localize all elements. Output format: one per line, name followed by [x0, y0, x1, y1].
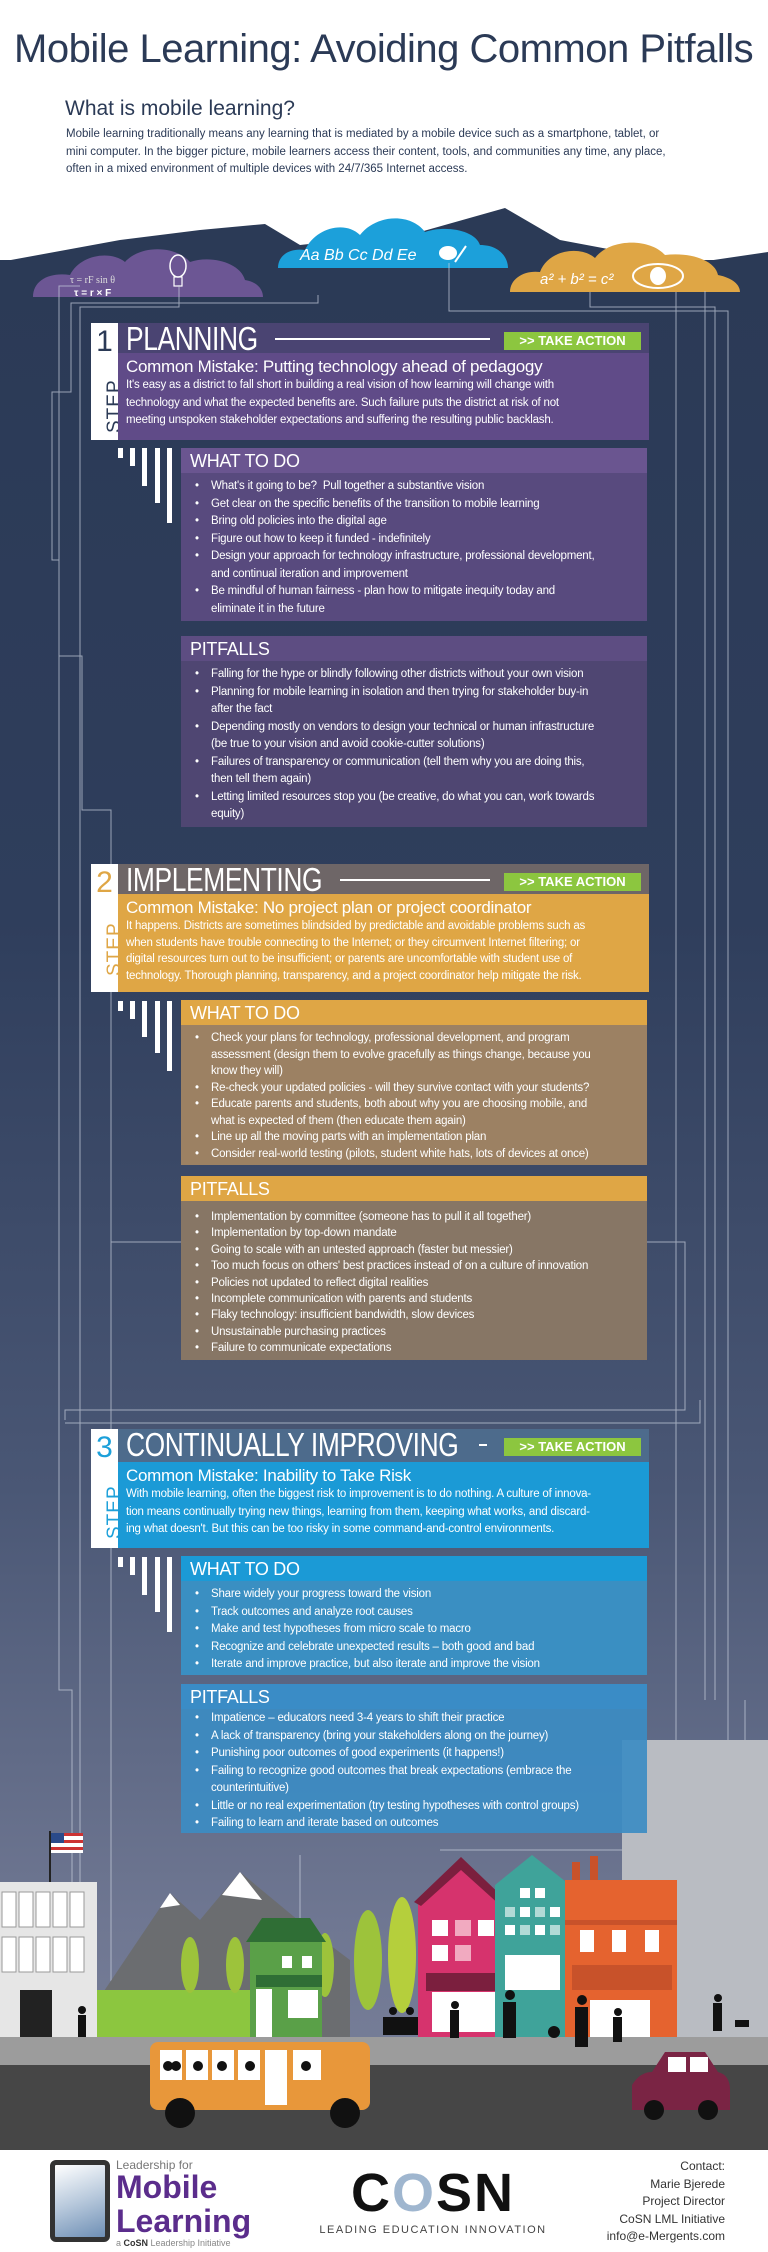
- common mistake text: ing what doesn't. But this can be too risky in some command-and-control environments.: [126, 1523, 554, 1535]
- pitfalls 2: Implementation by top-down mandate: [211, 1227, 397, 1239]
- pitfalls 2: Flaky technology: insufficient bandwidth, slow devices: [211, 1309, 474, 1321]
- pitfalls 1: Failures of transparency or communication (tell them why you are doing this,: [211, 756, 584, 768]
- pitfalls 2: Policies not updated to reflect digital realities: [211, 1277, 428, 1289]
- pitfalls 2: Going to scale with an untested approach (faster but messier): [211, 1244, 513, 1256]
- common mistake text: [118, 894, 649, 992]
- pitfalls 3: Little or no real experimentation (try testing hypotheses with control groups): [211, 1800, 579, 1812]
- what to do 2: what is expected of them (then educate them again): [211, 1114, 466, 1126]
- logo: leadership for mobile learning: Mobile: [116, 2169, 217, 2205]
- pitfalls 1: Depending mostly on vendors to design your technical or human infrastructure: [211, 720, 594, 732]
- what to do 1: WHAT TO DO: [190, 451, 300, 471]
- common mistake text: [118, 353, 649, 440]
- cloud: orange: [510, 243, 740, 292]
- pitfalls 2: Too much focus on others' best practices instead of on a culture of innovation: [211, 1260, 588, 1272]
- cloud: orange: a² + b² = c²: [540, 271, 614, 288]
- pitfalls 2: PITFALLS: [190, 1179, 270, 1199]
- pitfalls 3: Failing to learn and iterate based on outcomes: [211, 1817, 438, 1829]
- what to do 3: Track outcomes and analyze root causes: [211, 1606, 413, 1618]
- decorative bars 2: [118, 1001, 172, 1071]
- pitfalls 1: (be true to your vision and avoid cookie-cutter solutions): [211, 738, 484, 750]
- what to do 2: Educate parents and students, both about why you are choosing mobile, and: [211, 1098, 587, 1110]
- step label: 3: [96, 1431, 113, 1464]
- town scene: [0, 1831, 768, 2150]
- step label: 1: [96, 325, 113, 358]
- header: implementing: [118, 864, 649, 894]
- step label: 2: [96, 866, 113, 899]
- footer: [0, 2150, 768, 2252]
- common mistake text: [118, 1462, 649, 1548]
- header: implementing: >> TAKE ACTION: [519, 874, 626, 889]
- common mistake text: With mobile learning, often the biggest risk to improvement is to do nothing. A culture of innova-: [126, 1488, 591, 1500]
- mountains and clouds: [11, 208, 768, 299]
- what to do 2: Line up all the moving parts with an implementation plan: [211, 1131, 486, 1143]
- pitfalls 3: Punishing poor outcomes of good experiments (it happens!): [211, 1747, 504, 1759]
- people: [78, 1990, 749, 2047]
- decorative bars 1: [118, 448, 172, 523]
- what to do 2: know they will): [211, 1065, 283, 1077]
- header: planning: PLANNING: [126, 320, 258, 357]
- what to do 1: Get clear on the specific benefits of the transition to mobile learning: [211, 498, 539, 510]
- cloud: purple: τ = rF sin θ: [70, 275, 115, 286]
- common mistake text: meeting unspoken stakeholder expectations and suffering the resulting public backlash.: [126, 414, 554, 426]
- what to do 1: Design your approach for technology infrastructure, professional development,: [211, 550, 594, 562]
- logo: leadership for mobile learning: Leadership for: [116, 2158, 193, 2172]
- what to do 2: Check your plans for technology, professional development, and program: [211, 1032, 569, 1044]
- pitfalls 1: equity): [211, 808, 244, 820]
- pink house: [414, 1857, 508, 2037]
- what to do 3: [181, 1556, 647, 1675]
- step label: [91, 323, 118, 440]
- what to do 1: Bring old policies into the digital age: [211, 515, 387, 527]
- logo: cosn: [319, 2163, 547, 2236]
- step label: STEP: [104, 379, 125, 433]
- header: planning: [118, 323, 649, 353]
- common mistake text: Common Mistake: Putting technology ahead of pedagogy: [126, 357, 542, 376]
- header: continually improving: >> TAKE ACTION: [519, 1439, 626, 1454]
- pitfalls 3: [181, 1684, 647, 1833]
- header: continually improving: CONTINUALLY IMPROVING: [126, 1426, 458, 1463]
- what to do 3: WHAT TO DO: [190, 1559, 300, 1579]
- school building: [0, 1882, 97, 2037]
- what to do 3: Share widely your progress toward the vision: [211, 1588, 431, 1600]
- logo: cosn: COSN: [351, 2163, 515, 2223]
- pitfalls 2: [181, 1176, 647, 1360]
- common mistake text: tion means continually trying new things, learning from them, keeping what works, and discard-: [126, 1506, 590, 1518]
- contact info: Contact:: [680, 2159, 725, 2173]
- common mistake text: digital resources turn out to be insufficient; or parents are uncomfortable with student use of: [126, 953, 572, 965]
- header: continually improving: [118, 1429, 649, 1462]
- what to do 1: eliminate it in the future: [211, 602, 325, 614]
- sidewalk and road: [0, 2037, 768, 2065]
- common mistake text: when students have trouble connecting to the Internet; or they circumvent Internet filtering; or: [126, 936, 580, 948]
- pitfalls 3: A lack of transparency (bring your stakeholders along on the journey): [211, 1730, 548, 1742]
- header: implementing: IMPLEMENTING: [126, 861, 322, 898]
- pitfalls 2: Failure to communicate expectations: [211, 1342, 391, 1354]
- contact info: info@e-Mergents.com: [607, 2229, 725, 2243]
- pitfalls 1: Planning for mobile learning in isolation and then trying for stakeholder buy-in: [211, 686, 588, 698]
- cloud: purple: τ = r × F: [74, 288, 111, 299]
- what to do 1: What's it going to be? Pull together a substantive vision: [211, 480, 484, 492]
- what to do 1: Be mindful of human fairness - plan how to mitigate inequity today and: [211, 585, 555, 597]
- what to do 3: Make and test hypotheses from micro scale to macro: [211, 1623, 471, 1635]
- intro paragraph: often in a mixed environment of multiple devices with 24/7/365 Internet access.: [66, 163, 467, 175]
- header: planning: >> TAKE ACTION: [519, 333, 626, 348]
- car: [632, 2052, 730, 2120]
- step 2: implementing: [91, 861, 649, 992]
- intro paragraph: [66, 128, 666, 175]
- common mistake text: Common Mistake: No project plan or project coordinator: [126, 898, 531, 917]
- what to do 2: WHAT TO DO: [190, 1003, 300, 1023]
- pitfalls 1: PITFALLS: [190, 639, 270, 659]
- step 3: continually improving: [91, 1426, 649, 1548]
- common mistake text: Common Mistake: Inability to Take Risk: [126, 1466, 411, 1485]
- subheading: what is mobile learning: What is mobile learning?: [65, 97, 295, 120]
- contact info: Marie Bjerede: [650, 2176, 725, 2190]
- pitfalls 2: Unsustainable purchasing practices: [211, 1326, 386, 1338]
- what to do 1: and continual iteration and improvement: [211, 568, 408, 580]
- step 1: planning: [91, 320, 649, 440]
- teal house: [495, 1855, 570, 2037]
- bus: [150, 2042, 370, 2128]
- orange house: [565, 1856, 677, 2037]
- pitfalls 1: Falling for the hype or blindly following other districts without your own vision: [211, 668, 583, 680]
- pitfalls 1: Letting limited resources stop you (be creative, do what you can, work towards: [211, 790, 594, 802]
- cloud: blue: Aa Bb Cc Dd Ee: [299, 247, 417, 264]
- intro paragraph: mini computer. In the bigger picture, mobile learners access their content, tools, and communities any time, any place,: [66, 146, 666, 158]
- step label: STEP: [104, 922, 125, 976]
- pitfalls 3: PITFALLS: [190, 1687, 270, 1707]
- logo: cosn: LEADING EDUCATION INNOVATION: [319, 2224, 547, 2236]
- pitfalls 3: counterintuitive): [211, 1782, 289, 1794]
- step label: [91, 1429, 118, 1548]
- logo: leadership for mobile learning: [50, 2158, 251, 2248]
- intro paragraph: Mobile learning traditionally means any learning that is mediated by a mobile device such as a smartphone, tablet, or: [66, 128, 659, 140]
- lawn: [97, 1990, 297, 2037]
- contact info: [607, 2159, 725, 2243]
- cloud: blue: [278, 218, 508, 268]
- what to do 1: [181, 448, 647, 621]
- logo: leadership for mobile learning: a CoSN Leadership Initiative: [116, 2238, 231, 2248]
- cloud: purple: [33, 249, 263, 299]
- light grey building backdrop: [622, 1740, 768, 2040]
- what to do 2: Consider real-world testing (pilots, student white hats, lots of devices at once): [211, 1148, 589, 1160]
- green house: [246, 1918, 326, 2037]
- title: Mobile Learning: Avoiding Common Pitfalls: [14, 27, 753, 71]
- common mistake text: technology and what the expected benefits are. Such failure puts the district at risk of not: [126, 396, 559, 408]
- step label: STEP: [104, 1485, 125, 1539]
- decorative bars 3: [118, 1557, 172, 1632]
- contact info: Project Director: [642, 2194, 725, 2208]
- what to do 3: Iterate and improve practice, but also iterate and improve the vision: [211, 1658, 540, 1670]
- common mistake text: technology. Thorough planning, transparency, and a project coordinator help mitigate the risk.: [126, 970, 582, 982]
- contact info: CoSN LML Initiative: [619, 2212, 725, 2226]
- pitfalls 1: then tell them again): [211, 773, 311, 785]
- what to do 1: Figure out how to keep it funded - indefinitely: [211, 532, 430, 544]
- what to do 2: Re-check your updated policies - will they survive contact with your students?: [211, 1082, 589, 1094]
- logo: leadership for mobile learning: Learning: [116, 2203, 251, 2239]
- pitfalls 3: Impatience – educators need 3-4 years to shift their practice: [211, 1712, 504, 1724]
- flag: [49, 1831, 83, 1883]
- pitfalls 1: after the fact: [211, 703, 272, 715]
- trees: [181, 1897, 416, 2013]
- pitfalls 2: Incomplete communication with parents and students: [211, 1293, 472, 1305]
- pitfalls 3: Failing to recognize good outcomes that break expectations (embrace the: [211, 1764, 571, 1776]
- step label: [91, 864, 118, 992]
- pitfalls 1: [181, 636, 647, 827]
- pitfalls 2: Implementation by committee (someone has to pull it all together): [211, 1211, 531, 1223]
- common mistake text: It's easy as a district to fall short in building a real vision of how learning will change with: [126, 379, 554, 391]
- what to do 3: Recognize and celebrate unexpected results – both good and bad: [211, 1640, 534, 1652]
- what to do 2: [181, 1000, 647, 1165]
- common mistake text: It happens. Districts are sometimes blindsided by predictable and avoidable problems such as: [126, 920, 585, 932]
- what to do 2: assessment (design them to evolve gracefully as things change, because you: [211, 1048, 591, 1060]
- mountains: [98, 1872, 350, 2037]
